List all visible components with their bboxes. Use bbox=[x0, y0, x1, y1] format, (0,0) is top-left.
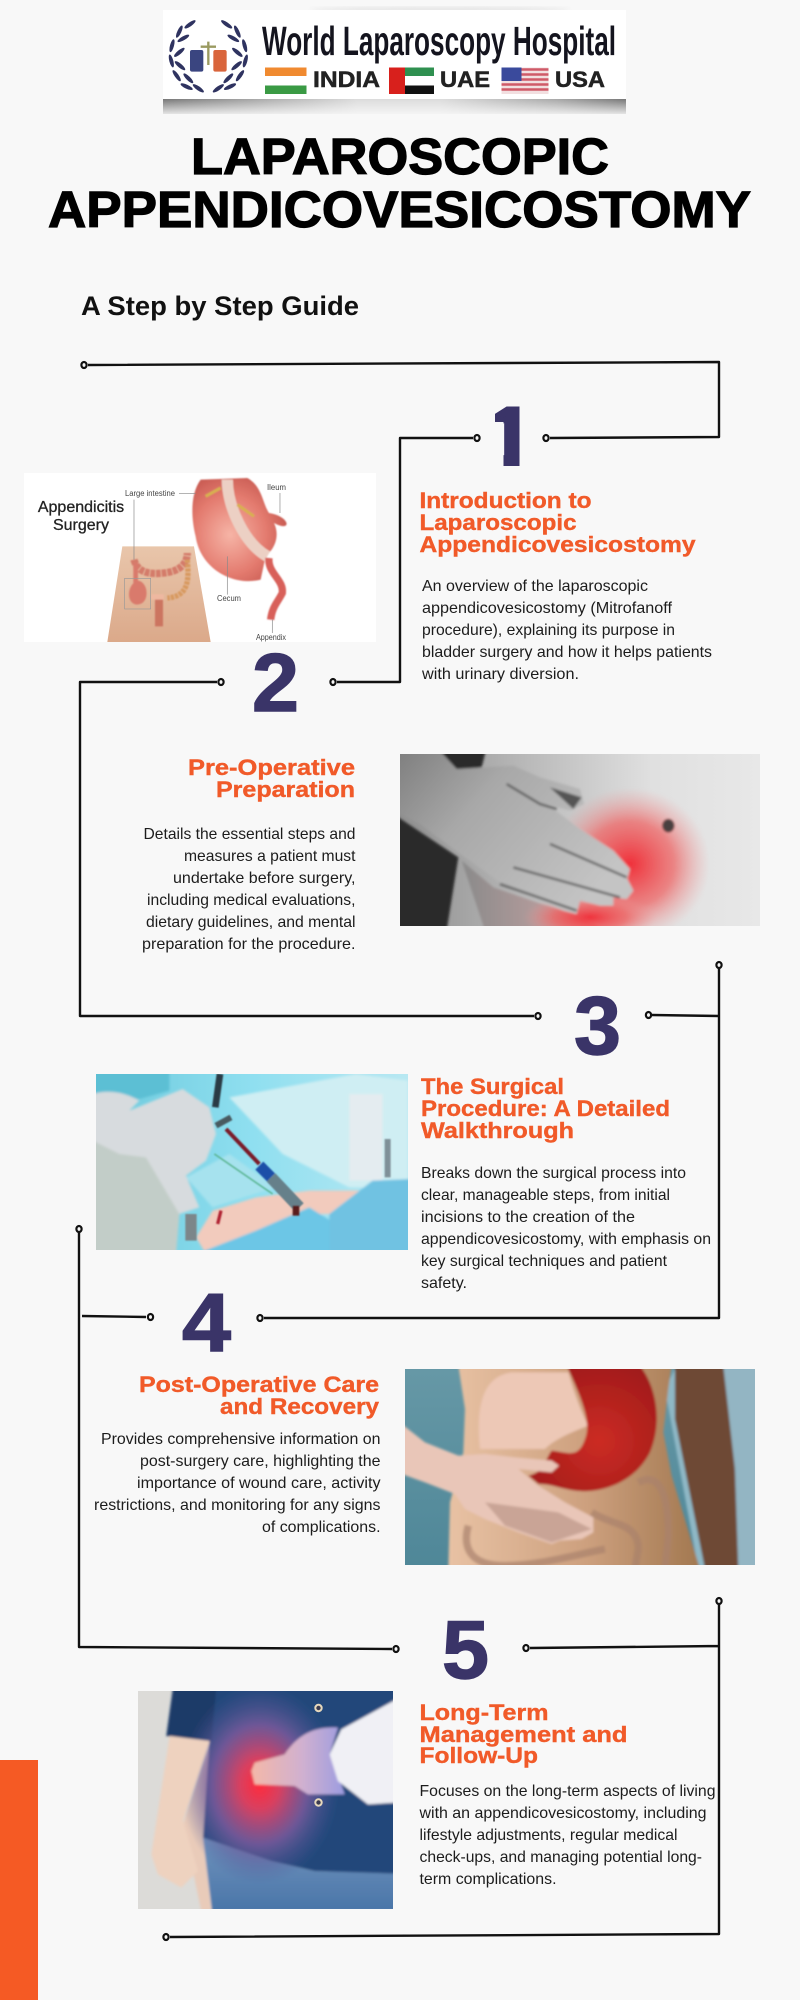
heading 1: Introduction to bbox=[420, 488, 592, 513]
number 2: 2 bbox=[252, 636, 299, 729]
heading 4 bbox=[139, 1372, 380, 1419]
title: LAPAROSCOPIC bbox=[191, 128, 609, 185]
body text 4: of complications. bbox=[262, 1519, 380, 1536]
body text 2: undertake before surgery, bbox=[173, 870, 356, 887]
heading 5: Long-Term bbox=[420, 1700, 548, 1725]
connector: step 5 to end bbox=[163, 1598, 722, 1940]
body text 2: preparation for the procedure. bbox=[142, 936, 356, 953]
image: appendicitis surgery anatomy: Appendix bbox=[256, 633, 286, 642]
body text 3: appendicovesicostomy, with emphasis on bbox=[421, 1231, 711, 1248]
title: APPENDICOVESICOSTOMY bbox=[48, 181, 751, 238]
image: hand on abdomen with red pain glow bbox=[400, 754, 760, 926]
image: appendicitis surgery anatomy bbox=[38, 477, 288, 642]
image: hands on abdomen with stomach overlay bbox=[402, 1366, 758, 1569]
body text 3: safety. bbox=[421, 1275, 467, 1292]
heading 3 bbox=[421, 1074, 670, 1143]
heading 5: Follow-Up bbox=[420, 1743, 538, 1768]
connector: intro to step 1 bbox=[81, 362, 719, 441]
heading 2 bbox=[188, 755, 355, 802]
logo: World Laparoscopy Hospital: UAE bbox=[440, 67, 490, 92]
icon: USA flag bbox=[502, 68, 548, 94]
body text 1: An overview of the laparoscopic bbox=[422, 578, 648, 595]
step 3 panel bbox=[93, 979, 711, 1292]
logo: World Laparoscopy Hospital bbox=[163, 7, 626, 114]
connector: step 4 to step 5 bbox=[76, 1226, 399, 1652]
image: appendicitis surgery anatomy: Cecum bbox=[217, 594, 241, 603]
body text 2: dietary guidelines, and mental bbox=[146, 914, 356, 931]
connector: step 3 to step 4 bbox=[257, 962, 722, 1321]
body text 4: importance of wound care, activity bbox=[137, 1475, 380, 1492]
step 4 panel bbox=[94, 1276, 758, 1569]
logo: World Laparoscopy Hospital: INDIA bbox=[313, 67, 380, 92]
heading 3: Walkthrough bbox=[421, 1118, 574, 1143]
subtitle: A Step by Step Guide bbox=[81, 291, 359, 321]
body text 4: Provides comprehensive information on bbox=[101, 1431, 380, 1448]
heading 1: Appendicovesicostomy bbox=[420, 532, 696, 557]
heading 1: Laparoscopic bbox=[420, 510, 576, 535]
body text 4: post-surgery care, highlighting the bbox=[140, 1453, 381, 1470]
heading 4: and Recovery bbox=[220, 1394, 380, 1419]
title bbox=[48, 128, 751, 238]
body text 5: check-ups, and managing potential long- bbox=[420, 1849, 702, 1866]
body text 2 bbox=[142, 826, 356, 953]
number 4: 4 bbox=[182, 1276, 231, 1369]
body text 3: incisions to the creation of the bbox=[421, 1209, 635, 1226]
body text 5: Focuses on the long-term aspects of living bbox=[420, 1783, 716, 1800]
step 2 panel bbox=[142, 636, 760, 953]
heading 3: The Surgical bbox=[421, 1074, 564, 1099]
body text 4 bbox=[94, 1431, 381, 1536]
icon: laurel wreath crest bbox=[168, 19, 249, 94]
image: person with abdominal pain and doctor's hand bbox=[138, 1684, 396, 1911]
body text 5 bbox=[419, 1783, 716, 1888]
body text 5: with an appendicovesicostomy, including bbox=[419, 1805, 706, 1822]
body text 2: Details the essential steps and bbox=[144, 826, 356, 843]
orange corner block bbox=[0, 1760, 38, 2000]
number 5: 5 bbox=[442, 1603, 489, 1696]
icon: UAE flag bbox=[389, 68, 434, 94]
image: appendicitis surgery anatomy: Large intestine bbox=[125, 489, 176, 498]
image: appendicitis surgery anatomy: Ileum bbox=[267, 483, 286, 492]
body text 2: measures a patient must bbox=[184, 848, 356, 865]
step 1 panel bbox=[24, 391, 712, 683]
body text 3 bbox=[421, 1165, 711, 1292]
heading 3: Procedure: A Detailed bbox=[421, 1096, 670, 1121]
step 5 panel bbox=[138, 1603, 716, 1911]
logo: World Laparoscopy Hospital: USA bbox=[555, 67, 605, 92]
body text 3: clear, manageable steps, from initial bbox=[421, 1187, 670, 1204]
connector: step 1 to step 2 bbox=[330, 435, 480, 685]
heading 2: Pre-Operative bbox=[188, 755, 355, 780]
image: laparoscopic instruments in surgery bbox=[93, 1071, 411, 1254]
image: appendicitis surgery anatomy: Appendicitis bbox=[38, 499, 124, 516]
body text 1: with urinary diversion. bbox=[421, 666, 579, 683]
image: appendicitis surgery anatomy: Surgery bbox=[53, 517, 109, 534]
body text 3: Breaks down the surgical process into bbox=[421, 1165, 686, 1182]
number 3: 3 bbox=[574, 979, 621, 1072]
body text 1: appendicovesicostomy (Mitrofanoff bbox=[422, 600, 673, 617]
body text 5: lifestyle adjustments, regular medical bbox=[420, 1827, 678, 1844]
body text 2: including medical evaluations, bbox=[147, 892, 356, 909]
body text 1 bbox=[421, 578, 712, 683]
heading 5: Management and bbox=[420, 1722, 628, 1747]
heading 1 bbox=[420, 488, 696, 557]
icon: India flag bbox=[265, 68, 306, 94]
connector: step 2 to step 3 bbox=[80, 679, 541, 1019]
body text 1: procedure), explaining its purpose in bbox=[422, 622, 675, 639]
body text 3: key surgical techniques and patient bbox=[421, 1253, 668, 1270]
body text 5: term complications. bbox=[420, 1871, 556, 1888]
heading 2: Preparation bbox=[216, 777, 355, 802]
body text 4: restrictions, and monitoring for any signs bbox=[94, 1497, 380, 1514]
number 1: 1 bbox=[487, 391, 534, 484]
heading 5 bbox=[420, 1700, 628, 1768]
body text 1: bladder surgery and how it helps patients bbox=[422, 644, 712, 661]
heading 4: Post-Operative Care bbox=[139, 1372, 379, 1397]
